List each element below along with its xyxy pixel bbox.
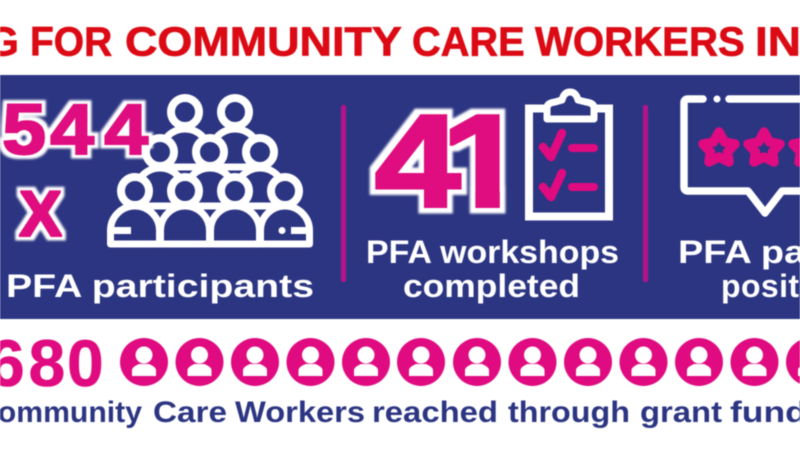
icon row: community care workers [120,338,800,386]
label: PFA participants: PFA participants [6,268,314,304]
panel: navy stats banner [0,75,800,319]
title: COMMUNITY [125,19,402,65]
caption: Workers [235,396,365,429]
caption: grant [640,396,722,429]
stat: 41: 41 [374,87,527,235]
title: FOR [30,20,112,65]
stat: 544: 544 [2,90,148,169]
title [0,18,800,65]
divider [341,105,346,282]
title: CARE [412,18,525,65]
caption: reached [372,396,498,429]
label: PFA workshops completed: completed [403,268,580,304]
label: PFA workshops completed: PFA workshops [366,234,619,270]
title: IN [755,20,800,65]
label: PFA workshops completed [366,234,619,304]
icon: clipboard checklist [529,92,609,216]
title: WORKERS [535,18,745,65]
divider [643,105,648,282]
caption [0,396,800,429]
icon: speech bubble with stars [684,96,800,213]
label: PFA participants positive [678,234,800,304]
caption: Care [153,396,227,429]
caption: through [508,396,630,429]
icon: group of people [110,98,310,244]
stat: multiply sign: X [19,177,62,250]
